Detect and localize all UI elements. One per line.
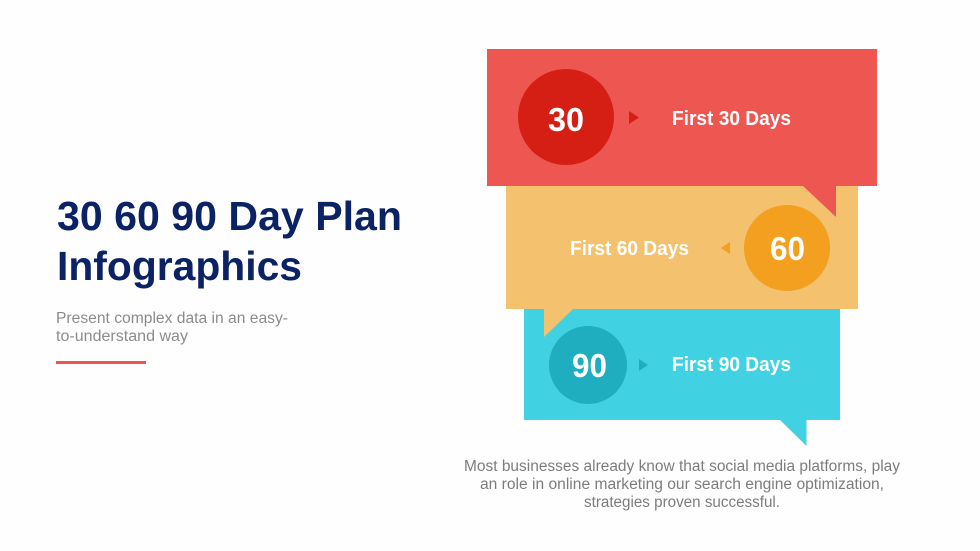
panel: first 90 days [524, 309, 840, 446]
description text [464, 458, 900, 511]
yellow speech box [506, 186, 858, 337]
subtitle text: Present complex data in an easy- [56, 310, 288, 327]
title: Infographics [57, 243, 302, 289]
red speech box [487, 49, 877, 217]
accent underline [56, 361, 146, 364]
circle badge 30: 30 [548, 102, 584, 139]
label: First 60 Days [570, 238, 689, 260]
label: First 30 Days [672, 108, 791, 130]
arrow right [639, 359, 648, 371]
circle badge 60 [744, 205, 830, 291]
circle badge 60: 60 [770, 231, 805, 268]
panel: first 60 days [506, 186, 858, 337]
arrow right [629, 111, 639, 124]
blue speech box [524, 309, 840, 446]
arrow left [721, 242, 730, 254]
subtitle text: to-understand way [56, 328, 188, 345]
title [57, 193, 402, 289]
title: 30 60 90 Day Plan [57, 193, 402, 239]
circle badge 90 [549, 326, 627, 404]
circle badge 30 [518, 69, 614, 165]
circle badge 90: 90 [572, 348, 607, 385]
description text: strategies proven successful. [584, 494, 780, 511]
panel: first 30 days [487, 49, 877, 217]
description text: an role in online marketing our search engine optimization, [480, 476, 884, 493]
label: First 90 Days [672, 354, 791, 376]
subtitle text [56, 310, 288, 345]
description text: Most businesses already know that social media platforms, play [464, 458, 900, 475]
